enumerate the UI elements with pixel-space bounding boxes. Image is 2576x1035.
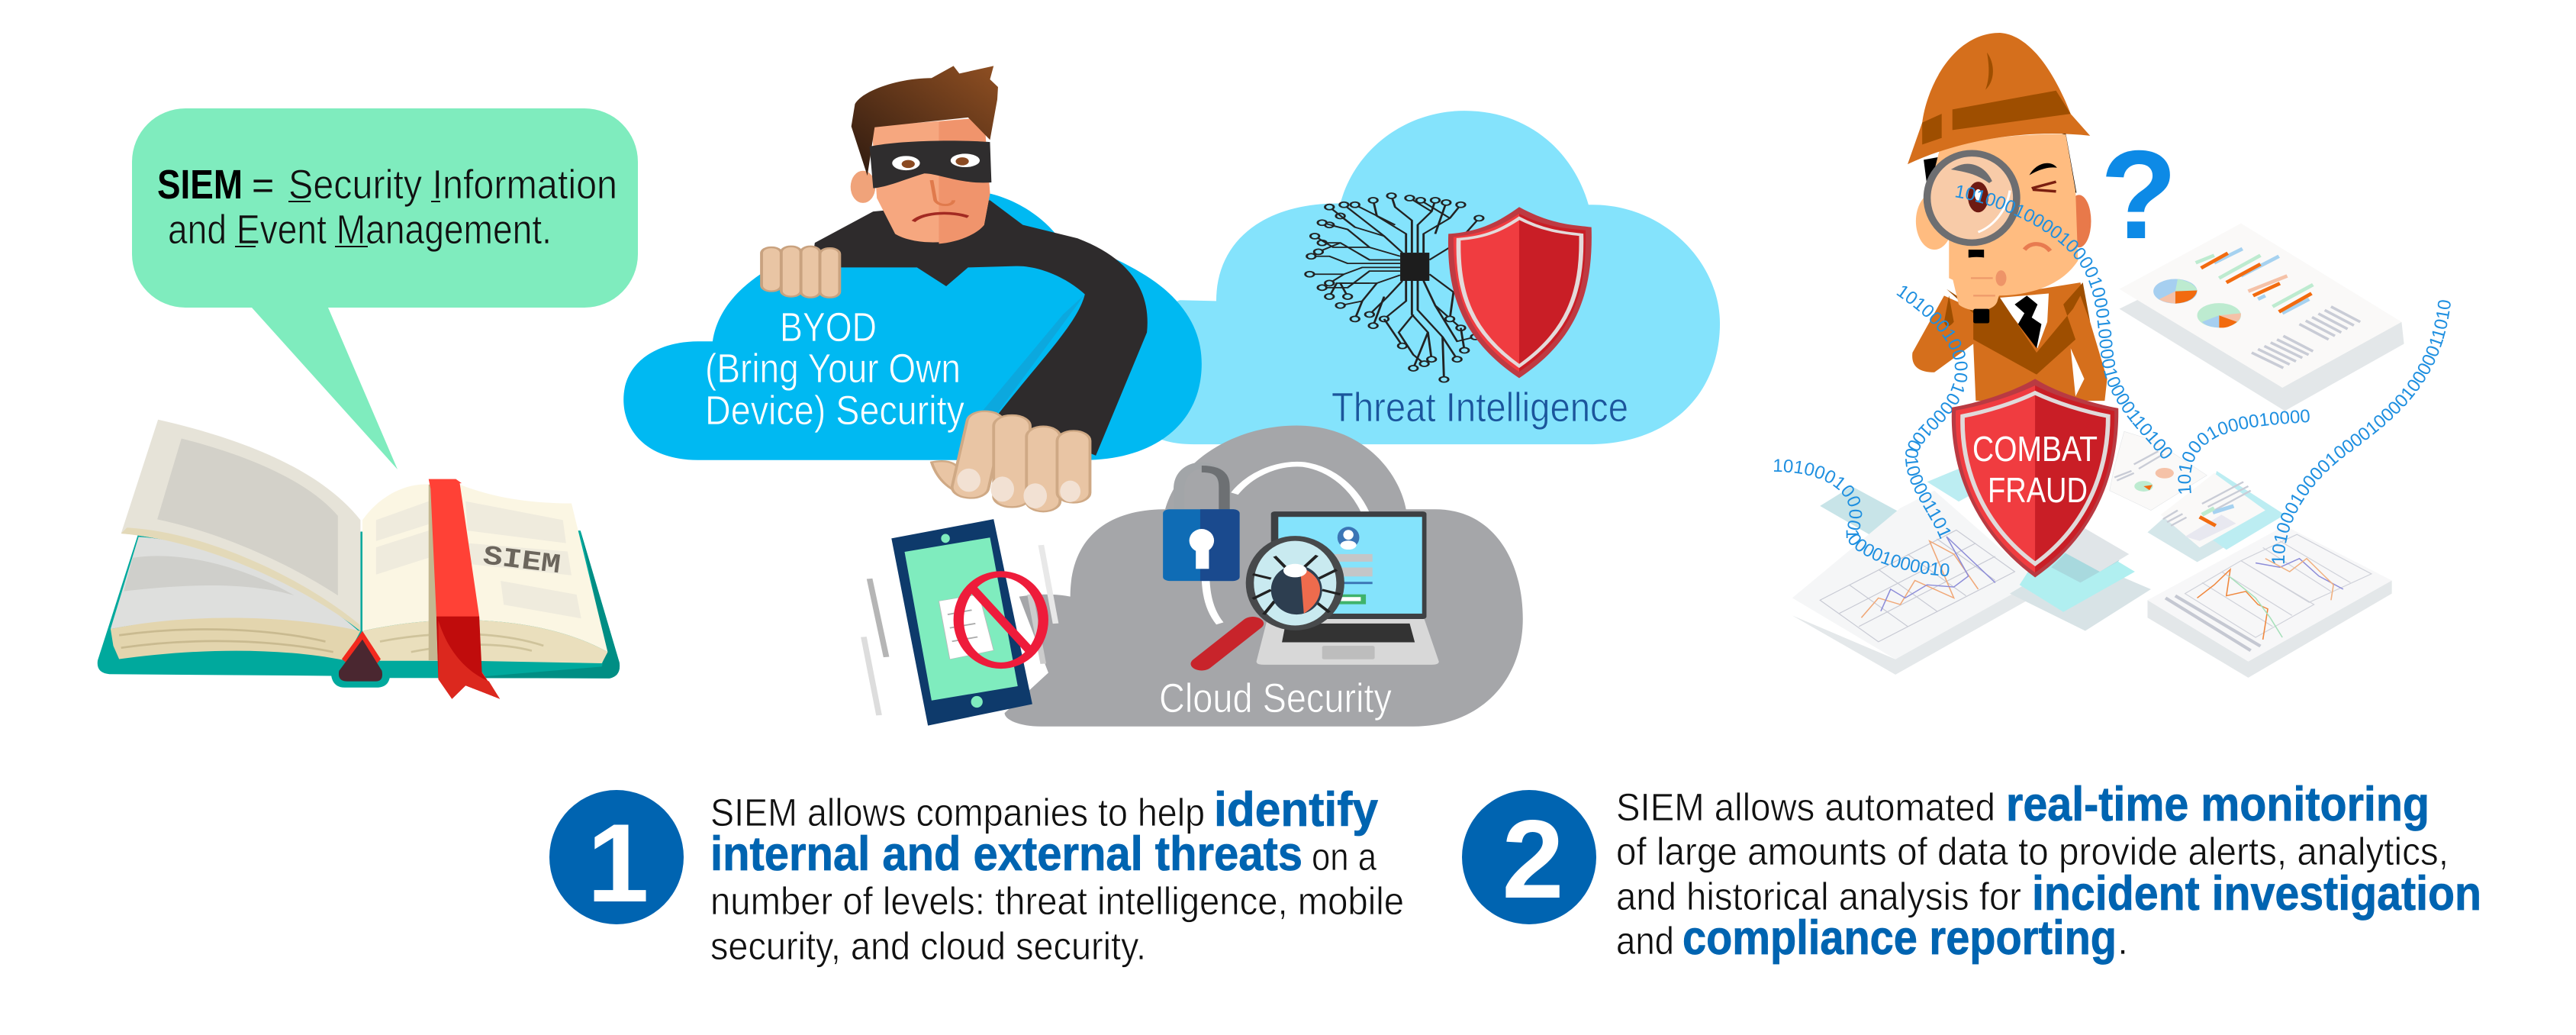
document: top right report xyxy=(2119,224,2404,411)
text block: point 1: identify xyxy=(1214,783,1378,837)
panel: point 2 xyxy=(1462,778,2481,965)
definition text: Security Information xyxy=(288,162,617,208)
text block: point 1: security, and cloud security. xyxy=(710,924,1146,968)
badge: number 1: 1 xyxy=(587,801,649,925)
shield label xyxy=(1972,429,2098,510)
text block: point 1: number of levels: threat intelligence, mobile xyxy=(710,879,1404,923)
text block: point 2: SIEM allows automated xyxy=(1616,785,1995,829)
document: small centre reports xyxy=(2110,431,2285,562)
report documents xyxy=(1792,224,2404,678)
speech bubble xyxy=(132,108,638,469)
definition text: = xyxy=(252,164,274,207)
text block: point 2: . xyxy=(2117,919,2128,962)
text block: point 2: and xyxy=(1616,919,1674,962)
label: BYOD: Device) Security xyxy=(705,388,964,434)
icon: phone with prohibition sign xyxy=(864,519,1056,726)
binary data streams: 1010001000010000100001000001 xyxy=(1773,459,1949,576)
text block: point 2: incident investigation xyxy=(2032,867,2481,921)
shield label: COMBAT xyxy=(1972,429,2098,469)
panel: SIEM definition and book xyxy=(98,108,638,699)
text block: point 2: real-time monitoring xyxy=(2006,778,2429,831)
definition text xyxy=(157,162,617,253)
icon: open book xyxy=(98,420,620,699)
text block: point 1 xyxy=(710,783,1404,968)
cloud: BYOD xyxy=(623,66,1202,511)
icon: red shield xyxy=(1448,207,1592,378)
icon: padlock xyxy=(1163,466,1240,581)
hand: left fingers xyxy=(762,247,839,298)
icon: masked thief xyxy=(762,66,1148,511)
definition text: and Event Management. xyxy=(168,207,552,253)
icon: laptop with bug magnifier xyxy=(1202,511,1439,665)
document: teal centre sheets xyxy=(1927,469,2151,630)
text block: point 1: internal and external threats xyxy=(710,827,1302,881)
document: bottom right charts xyxy=(2147,526,2392,678)
label: BYOD xyxy=(705,305,964,434)
text block: point 2: compliance reporting xyxy=(1682,911,2117,965)
definition text: SIEM xyxy=(157,162,243,208)
text block: point 1: SIEM allows companies to help xyxy=(710,791,1205,834)
binary data streams xyxy=(1773,185,2451,576)
panel: detective and reports xyxy=(1773,33,2451,678)
panel: point 1 xyxy=(549,783,1404,968)
cloud: threat intelligence xyxy=(1143,111,1720,444)
icon: detective xyxy=(1908,33,2107,401)
text block: point 2: of large amounts of data to provide alerts, analytics, xyxy=(1616,830,2449,873)
binary data streams: 10100010000100001000010000011010100 xyxy=(2272,300,2451,563)
icon: question mark: ? xyxy=(2101,124,2177,265)
cloud: cloud security xyxy=(864,426,1523,727)
book title: SIEM xyxy=(481,540,562,581)
label: BYOD: (Bring Your Own xyxy=(705,346,961,392)
panel: security clouds xyxy=(623,66,1720,727)
badge: number 1 xyxy=(549,790,684,925)
hand: right fingers xyxy=(932,410,1090,511)
label: cloud security: Cloud Security xyxy=(1159,675,1392,721)
text block: point 1: on a xyxy=(1312,835,1377,879)
shield label: FRAUD xyxy=(1988,470,2088,510)
label: BYOD: BYOD xyxy=(780,305,877,350)
badge: number 2: 2 xyxy=(1502,797,1564,921)
text block: point 2 xyxy=(1616,778,2481,965)
icon: combat fraud shield xyxy=(1952,379,2118,577)
badge: number 2 xyxy=(1462,790,1596,924)
text block: point 2: and historical analysis for xyxy=(1616,875,2021,918)
label: threat intelligence: Threat Intelligence xyxy=(1331,385,1628,430)
icon: magnifying glass xyxy=(1927,153,2017,257)
document: bottom left chart xyxy=(1792,486,2037,675)
icon: circuit brain xyxy=(1309,196,1479,379)
